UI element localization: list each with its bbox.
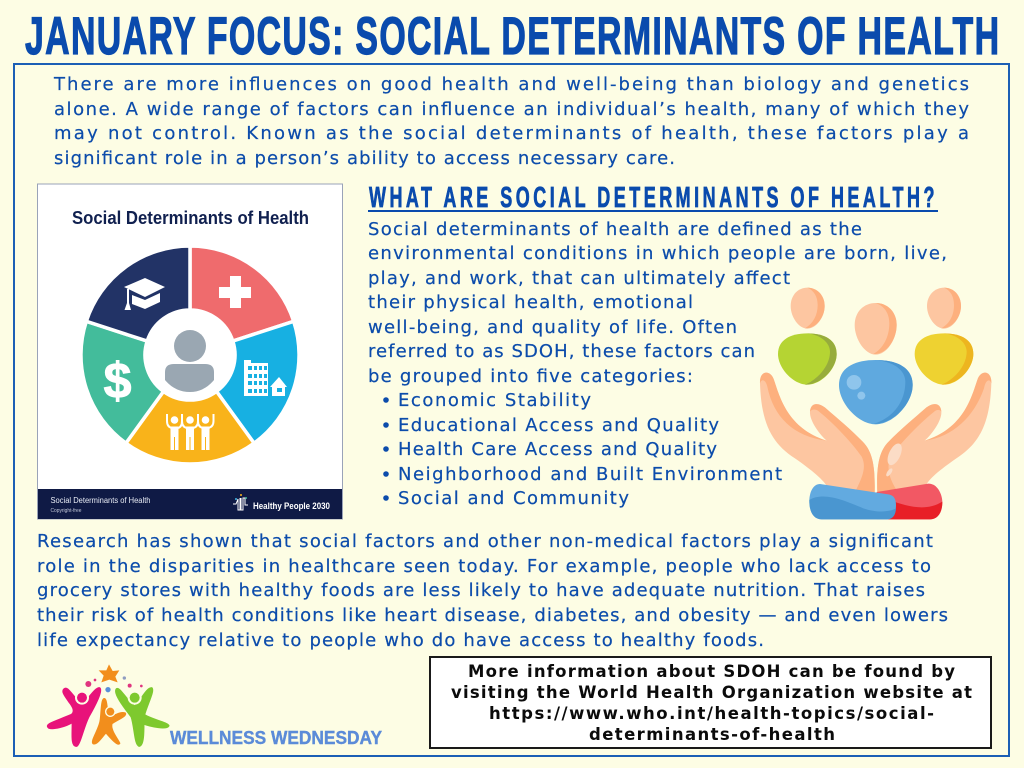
logo: Wellness Wednesday [48,664,168,746]
icon: dollar sign: $ [104,353,132,409]
definition paragraph: Social determinants of health are defined as the [368,219,862,240]
icon: three people [167,414,214,450]
title: JANUARY FOCUS: SOCIAL DETERMINANTS OF HEALTH [25,8,999,66]
wheel chart [81,246,299,464]
centre person [839,303,913,424]
intro paragraph: alone. A wide range of factors can influence an individual’s health, many of which they [54,99,969,120]
research paragraph: life expectancy relative to people who do have access to healthy foods. [37,630,764,651]
intro paragraph: significant role in a person’s ability to access necessary care. [54,148,675,169]
research paragraph: Research has shown that social factors and other non-medical factors play a significant [37,531,933,552]
section heading: WHAT ARE SOCIAL DETERMINANTS OF HEALTH? [369,182,934,214]
footer caption: Social Determinants of Health [50,496,150,505]
blue cuff [809,484,896,519]
copyright note: Copyright-free [50,508,82,514]
left person [778,288,837,385]
icon: medical cross [219,276,251,308]
icon: pink figure [48,688,100,746]
left hand [760,373,875,493]
Healthy People logo [233,494,330,512]
icon: star [99,664,119,682]
research paragraph [37,531,948,651]
intro paragraph [53,74,969,169]
icon: orange figure [93,699,125,744]
definition paragraph [368,219,947,387]
research paragraph: their risk of health conditions like heart disease, diabetes, and obesity — and even lowers [37,605,948,626]
Healthy People logo: Healthy People 2030 [253,501,330,512]
intro paragraph: may not control. Known as the social determinants of health, these factors play a [54,123,969,144]
definition paragraph: their physical health, emotional [368,292,693,313]
category list: Economic Stability [398,390,591,411]
definition paragraph: be grouped into five categories: [368,366,693,387]
definition paragraph: well-being, and quality of life. Often [368,317,737,338]
category list: Educational Access and Quality [398,415,719,436]
research paragraph: grocery stores with healthy foods are less likely to have adequate nutrition. That raises [37,580,925,601]
callout: more information: https://www.who.int/health-topics/social- [489,704,934,723]
image footer bar [38,489,342,519]
decorative small stars [85,676,143,692]
right person [915,288,973,385]
definition paragraph: play, and work, that can ultimately affect [368,268,790,289]
wheel heading: Social Determinants of Health [72,207,309,228]
illustration: hands holding people [760,288,991,519]
icon: graduation cap [124,278,165,310]
panel: social determinants wheel image [38,184,342,519]
logo wordmark: WELLNESS WEDNESDAY [170,728,382,748]
red cuff [877,484,942,519]
callout: more information: visiting the World Health Organization website at [451,683,972,702]
callout: more information: More information about SDOH can be found by [468,662,955,681]
intro paragraph: There are more influences on good health and well-being than biology and genetics [53,74,969,95]
callout: more information [430,657,991,748]
definition paragraph: referred to as SDOH, these factors can [368,341,755,362]
definition paragraph: environmental conditions in which people are born, live, [368,243,947,264]
category list [383,390,782,509]
right hand [877,373,991,493]
research paragraph: role in the disparities in healthcare seen today. For example, people who lack access to [37,556,931,577]
icon: person [165,330,214,392]
callout: more information: determinants-of-health [589,725,835,744]
category list: Health Care Access and Quality [398,439,717,460]
icon: green figure [116,688,168,746]
category list: Neighborhood and Built Environment [398,464,782,485]
icon: buildings [244,360,287,396]
category list: Social and Community [398,488,629,509]
